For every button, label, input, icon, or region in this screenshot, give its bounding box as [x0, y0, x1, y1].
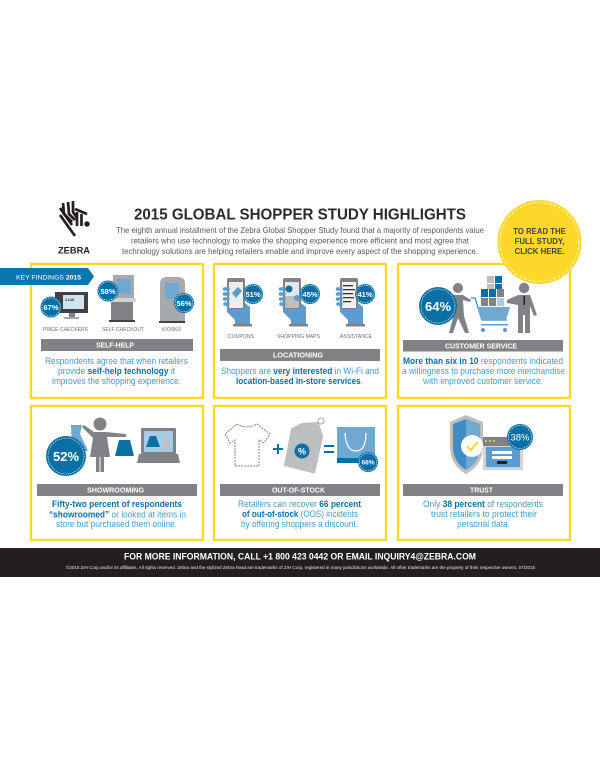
badge: 41%: 41% [357, 290, 373, 299]
text: customer service [402, 356, 565, 387]
text: out-of-stock [238, 499, 362, 530]
icon: dashed t-shirt [225, 424, 270, 466]
text: out-of-stock: of out-of-stock (OOS) incidents [242, 509, 358, 520]
text: trust [423, 499, 543, 530]
icon: login window [483, 437, 523, 470]
labels: KIOSKS [162, 327, 182, 333]
panel: out-of-stock [214, 406, 386, 540]
icon: store associate [507, 283, 537, 333]
icon: self checkout [108, 275, 136, 322]
icon: skirt on hanger [115, 440, 134, 456]
intro text: retailers who use technology to make the shopping experience more efficient and most agree that [131, 235, 470, 245]
badge: 67%: 67% [43, 303, 59, 312]
logo: Zebra: ZEBRA [58, 246, 91, 256]
text: showrooming [49, 499, 186, 530]
panel: trust [398, 406, 570, 540]
equals sign [324, 446, 334, 452]
text: showrooming: store but purchased them online. [56, 519, 177, 530]
badge: 58% [98, 280, 118, 302]
text: showrooming: “showroomed” or looked at items in [49, 510, 186, 520]
badge: 45%: 45% [302, 290, 318, 299]
badge: 38%: 38% [510, 432, 530, 444]
badge: 52% [46, 436, 86, 476]
text: customer service: with improved customer service. [422, 376, 543, 387]
badge: 51%: 51% [245, 290, 261, 299]
flag: key findings [0, 268, 94, 285]
labels [228, 334, 373, 340]
icon: shopping bag [337, 427, 375, 463]
badge: 64% [419, 287, 457, 325]
icon: shopper with cart [449, 276, 510, 333]
callout: read the full study: FULL STUDY, [515, 237, 564, 246]
icon: shield [450, 415, 483, 474]
text: out-of-stock: Retailers can recover 66 percent [238, 499, 362, 510]
icon: woman shopper [82, 418, 126, 472]
heading bar: locationing: LOCATIONING [273, 352, 324, 360]
plus sign [273, 444, 283, 454]
badge: 64%: 64% [425, 299, 451, 314]
text: customer service: a willingness to purchase more merchandise [402, 366, 565, 377]
badge: 56%: 56% [176, 299, 192, 308]
flag: key findings: KEY FINDINGS 2015 [16, 274, 81, 282]
labels: ASSISTANCE [340, 334, 373, 340]
labels: PRICE CHECKERS [43, 327, 89, 333]
badge: 51% [243, 284, 263, 304]
heading bar: trust [403, 484, 563, 496]
callout: read the full study [498, 200, 582, 284]
heading bar: out-of-stock [220, 484, 380, 496]
badge: 66%: 66% [361, 460, 375, 466]
badge: 45% [300, 284, 320, 304]
labels [43, 327, 182, 333]
callout: read the full study: CLICK HERE. [515, 247, 564, 256]
badge: 66% [358, 452, 378, 472]
labels: SELF CHECKOUT [102, 327, 145, 333]
heading bar: out-of-stock: OUT-OF-STOCK [272, 488, 325, 494]
icon: price checker monitor [55, 292, 88, 319]
footer: ©2015 ZIH Corp and/or its affiliates. All rights reserved. Zebra and the stylized Zebra head are trademarks of ZIH Corp, registered in many jurisdictions worldwide. All other trademarks are the property of their respective owners. 07/2015 [66, 565, 536, 570]
icon: coupons phone [224, 278, 252, 326]
icon: discount tag [282, 416, 327, 474]
text: self-help [45, 356, 188, 387]
callout: read the full study: TO READ THE [513, 227, 566, 236]
text: showrooming: Fifty-two percent of respondents [52, 499, 182, 510]
text: trust: personal data. [457, 519, 510, 530]
text: self-help: improves the shopping experience. [52, 376, 181, 387]
title: 2015 GLOBAL SHOPPER STUDY HIGHLIGHTS [134, 206, 466, 224]
text: locationing [221, 366, 379, 387]
heading bar: showrooming [37, 484, 197, 496]
panel: locationing [214, 264, 386, 398]
text: locationing: location-based in-store services. [236, 376, 363, 387]
labels: SHOPPING MAPS [277, 334, 321, 340]
footer: FOR MORE INFORMATION, CALL +1 800 423 0442 OR EMAIL INQUIRY4@ZEBRA.COM [124, 552, 476, 562]
icon: discount tag: % [298, 446, 306, 456]
badge: 58%: 58% [100, 287, 116, 296]
icon: shopping maps phone [280, 278, 308, 326]
panel: customer service [398, 264, 570, 398]
icon: dress on hanger [71, 425, 88, 451]
icon: laptop [137, 428, 180, 463]
panel: showrooming [31, 406, 203, 540]
heading bar: self-help: SELF-HELP [96, 342, 134, 350]
text: self-help: Respondents agree that when retailers [45, 356, 188, 367]
heading bar: self-help [41, 339, 193, 351]
heading bar: customer service [403, 340, 563, 352]
icon: kiosk [159, 277, 185, 323]
text: trust: Only 38 percent of respondents [423, 499, 543, 510]
labels: COUPONS [228, 334, 255, 340]
icon: price checker monitor: 2148 [65, 297, 75, 302]
footer [0, 548, 600, 577]
text: self-help: provide self-help technology it [58, 366, 175, 377]
badge: 38% [507, 424, 533, 450]
heading bar: trust: TRUST [470, 488, 494, 494]
text: locationing: Shoppers are very interested in Wi-Fi and [221, 366, 379, 377]
heading bar: showrooming: SHOWROOMING [87, 488, 145, 494]
text: trust: trust retailers to protect their [431, 509, 537, 520]
panel: self-help [31, 264, 203, 398]
heading bar: locationing [220, 349, 380, 361]
heading bar: customer service: CUSTOMER SERVICE [445, 344, 517, 350]
logo: Zebra [58, 201, 91, 256]
icon: assistance phone [338, 278, 365, 326]
badge: 52%: 52% [53, 449, 79, 464]
badge: 41% [355, 284, 375, 304]
intro text [116, 225, 484, 256]
text: customer service: More than six in 10 respondents indicated [403, 356, 563, 367]
text: out-of-stock: by offering shoppers a discount. [241, 519, 358, 530]
badge: 67% [40, 296, 62, 318]
intro text: technology solutions are helping retailers enable and improve every aspect of the shopping experience. [122, 246, 478, 256]
badge: 56% [174, 293, 194, 313]
intro text: The eighth annual installment of the Zebra Global Shopper Study found that a majority of respondents value [116, 225, 484, 235]
